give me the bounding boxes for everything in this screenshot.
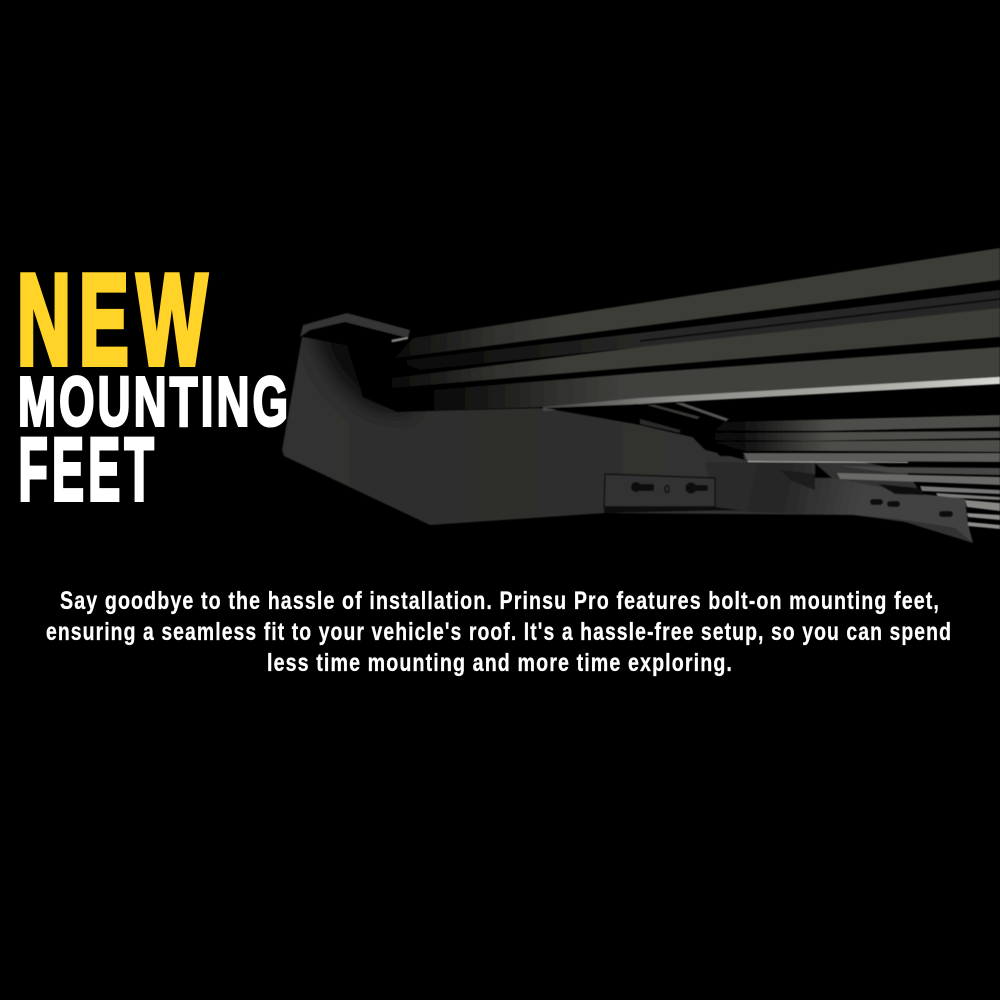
lower rail band [397, 347, 1000, 412]
mounting foot plate [282, 325, 973, 543]
title word: NEW: NEW [17, 249, 215, 392]
title word: FEET: FEET [18, 420, 158, 520]
description text [46, 587, 952, 677]
middle rail channel [392, 290, 1000, 388]
rail highlight edge [543, 377, 1000, 411]
title [17, 249, 291, 520]
foot right wing [705, 462, 973, 543]
description text: less time mounting and more time exploring. [267, 649, 733, 677]
lower rail stack [715, 415, 1000, 529]
roof rack product illustration [282, 248, 1000, 543]
bracket plate with bolts [604, 474, 740, 513]
rear bolts [870, 499, 953, 517]
title words: MOUNTING: MOUNTING [18, 363, 291, 441]
inner foot ledge [545, 403, 745, 460]
foot top flange [300, 313, 410, 345]
upper rail band [395, 248, 1000, 358]
